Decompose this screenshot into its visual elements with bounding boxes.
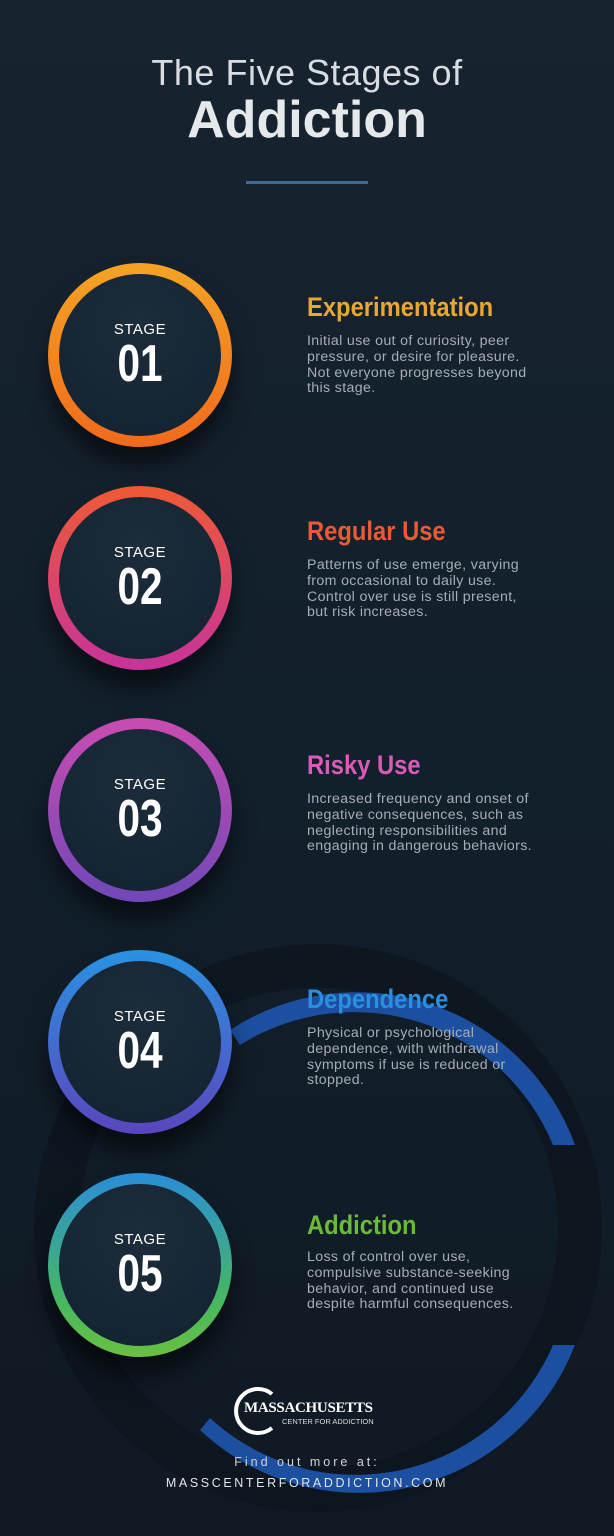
stage 3 text: neglecting responsibilities and <box>307 823 507 839</box>
stage 2 text: but risk increases. <box>307 604 428 620</box>
stage 5 title: Addiction <box>307 1210 417 1240</box>
title: Addiction <box>187 91 427 149</box>
stage 1 text: this stage. <box>307 380 376 396</box>
stage 3 circle: STAGE <box>114 776 166 793</box>
stage 3 text <box>307 791 532 854</box>
stage 5 text: behavior, and continued use <box>307 1281 494 1297</box>
stage 4 text: stopped. <box>307 1072 364 1088</box>
stage 4 circle: 04 <box>117 1022 163 1080</box>
stage 5 circle: 05 <box>117 1245 163 1303</box>
stage 5 text: despite harmful consequences. <box>307 1296 514 1312</box>
stage 2 circle: 02 <box>117 558 163 616</box>
stage 5 text <box>307 1249 514 1312</box>
stage 1 text: Initial use out of curiosity, peer <box>307 333 509 349</box>
stage 4 circle: STAGE <box>114 1008 166 1025</box>
logo <box>234 1387 374 1435</box>
stage 1 title: Experimentation <box>307 292 493 322</box>
stage 1 text <box>307 333 526 396</box>
stage 3 circle <box>48 718 232 902</box>
stage 1 circle <box>48 263 232 447</box>
footer url: MASSCENTERFORADDICTION.COM <box>166 1476 448 1490</box>
stage 3 text: engaging in dangerous behaviors. <box>307 838 532 854</box>
stage 2 circle <box>48 486 232 670</box>
logo: MASSACHUSETTS <box>244 1400 373 1416</box>
stage 3 title: Risky Use <box>307 750 421 780</box>
stage 5 text: Loss of control over use, <box>307 1249 470 1265</box>
stage 5 text: compulsive substance-seeking <box>307 1265 510 1281</box>
stage 5 circle: STAGE <box>114 1231 166 1248</box>
logo: CENTER FOR ADDICTION <box>282 1417 374 1426</box>
stage 4 text: symptoms if use is reduced or <box>307 1057 506 1073</box>
stage 4 title: Dependence <box>307 984 448 1014</box>
stage 1 text: pressure, or desire for pleasure. <box>307 349 520 365</box>
title: The Five Stages of <box>151 52 463 93</box>
stage 2 text: Control over use is still present, <box>307 589 517 605</box>
stage 3 circle: 03 <box>117 790 163 848</box>
title underline <box>246 181 368 184</box>
stage 2 circle: STAGE <box>114 544 166 561</box>
footer text: Find out more at: <box>234 1455 380 1469</box>
stage 2 text: Patterns of use emerge, varying <box>307 557 519 573</box>
stage 1 text: Not everyone progresses beyond <box>307 365 526 381</box>
stage 3 text: negative consequences, such as <box>307 807 523 823</box>
stage 1 circle: STAGE <box>114 321 166 338</box>
stage 4 text: dependence, with withdrawal <box>307 1041 499 1057</box>
stage 1 circle: 01 <box>117 335 163 393</box>
stage 4 text: Physical or psychological <box>307 1025 474 1041</box>
stage 4 circle <box>48 950 232 1134</box>
stage 4 text <box>307 1025 506 1088</box>
stage 5 circle <box>48 1173 232 1357</box>
stage 3 text: Increased frequency and onset of <box>307 791 529 807</box>
stage 2 text: from occasional to daily use. <box>307 573 496 589</box>
title <box>151 52 463 149</box>
stage 2 text <box>307 557 519 620</box>
stage 2 title: Regular Use <box>307 516 446 546</box>
